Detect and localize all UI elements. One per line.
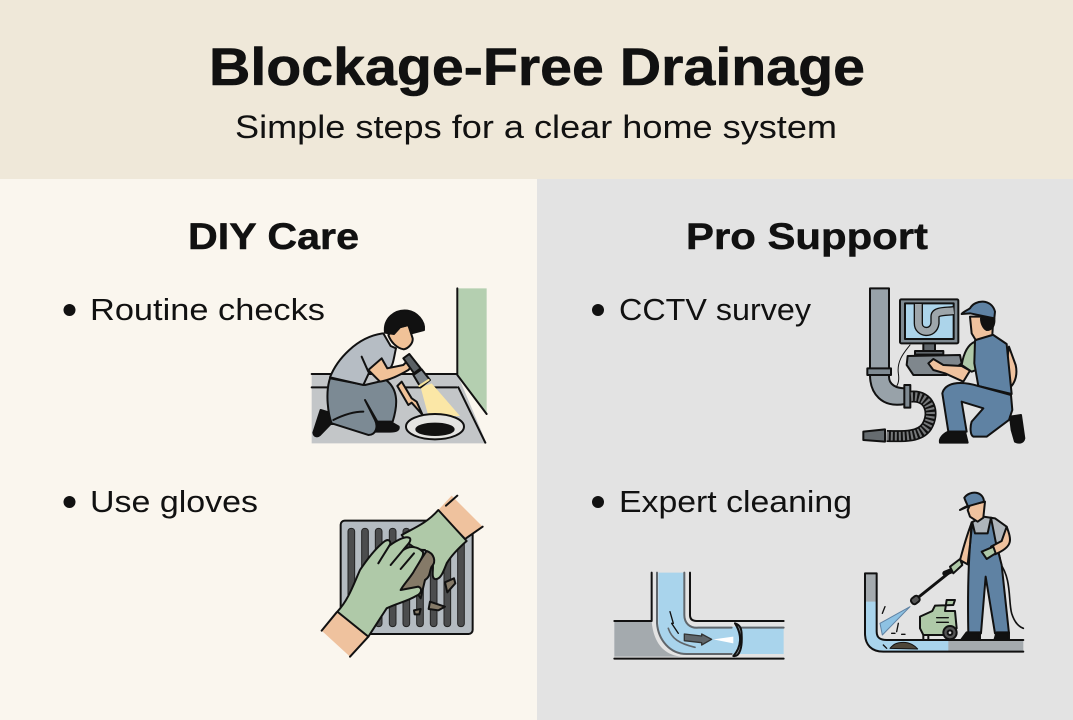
- trousers: [942, 383, 1012, 437]
- bullet: CCTV survey: CCTV survey: [619, 292, 812, 327]
- hair: [385, 311, 424, 334]
- face: [388, 325, 413, 349]
- icon: man inspecting drain with flashlight: [312, 288, 487, 443]
- heading: DIY Care: DIY Care: [188, 216, 359, 257]
- cap: [962, 302, 995, 318]
- head and cap: [968, 502, 985, 522]
- vest: [974, 334, 1012, 394]
- shirt: [965, 517, 1010, 558]
- face and neck: [970, 317, 993, 340]
- shirt: [330, 333, 396, 385]
- gloves: [982, 547, 996, 559]
- right arm: [1007, 347, 1016, 387]
- icon: technician with CCTV monitor and pipe: [863, 288, 1024, 443]
- trousers: [327, 378, 396, 435]
- subtitle: Simple steps for a clear home system: [235, 109, 837, 145]
- panel: DIY care: [0, 179, 537, 720]
- sleeve: [962, 342, 983, 372]
- icon: cleared pipe with water flow: [614, 573, 784, 659]
- debris: [401, 551, 434, 598]
- overalls: [968, 518, 1009, 633]
- lower glove: [337, 537, 423, 637]
- forearm: [928, 359, 970, 382]
- front shoe: [375, 420, 399, 432]
- icon: worker jetting pipe with pressure washer: [865, 493, 1023, 652]
- flashlight: [403, 354, 421, 373]
- arms: [368, 358, 415, 382]
- bullet: Routine checks: Routine checks: [90, 292, 325, 327]
- panel: header: [0, 0, 1073, 179]
- panel: Pro support: [537, 179, 1073, 720]
- heading: Pro Support: Pro Support: [686, 216, 928, 257]
- back shoe: [313, 410, 337, 436]
- icon: gloved hands clearing grate: [322, 496, 483, 657]
- bullet: Expert cleaning: Expert cleaning: [619, 484, 852, 519]
- bullet: Use gloves: Use gloves: [90, 484, 258, 519]
- pressure washer: [920, 600, 957, 635]
- upper glove: [402, 510, 467, 579]
- title: Blockage-Free Drainage: [209, 38, 865, 97]
- arms: [960, 523, 972, 564]
